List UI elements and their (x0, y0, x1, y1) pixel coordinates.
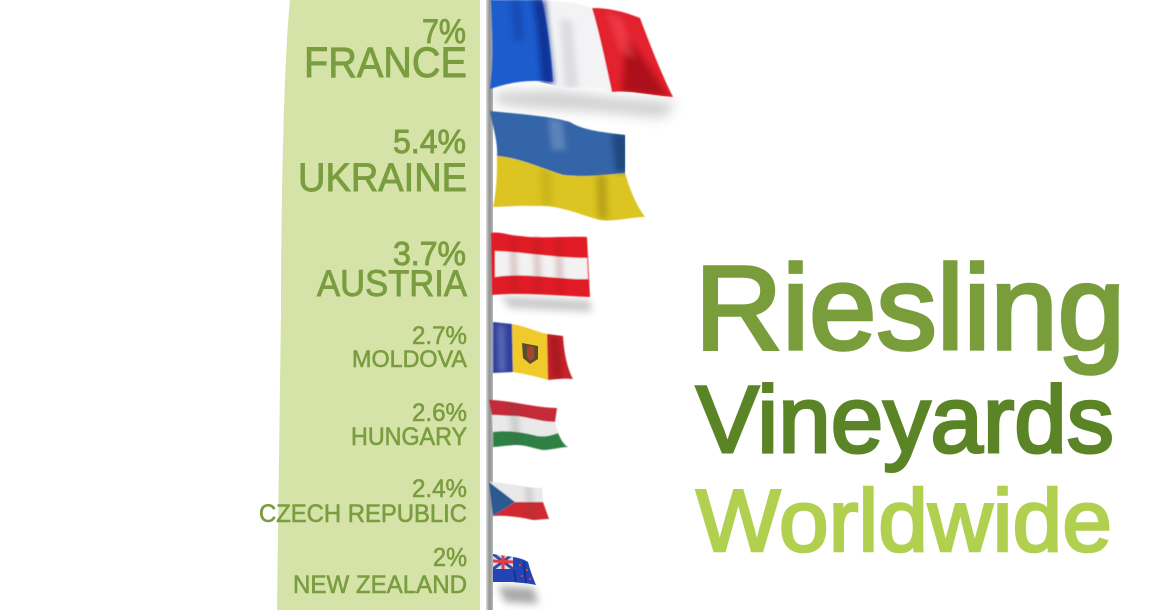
label: Moldova (352, 322, 467, 373)
title: Vineyards (696, 367, 1114, 473)
title (695, 241, 1125, 570)
flag: New Zealand (490, 552, 540, 604)
label: Ukraine: UKRAINE (298, 156, 467, 200)
flag: Hungary (489, 400, 568, 450)
label: Hungary (351, 399, 467, 451)
label: Czech Republic (259, 475, 467, 528)
title: Riesling (695, 241, 1125, 375)
flag: France (490, 0, 676, 118)
label: New Zealand: 2% (433, 542, 467, 572)
label: New Zealand: NEW ZEALAND (293, 571, 467, 599)
flag: Moldova (493, 322, 573, 380)
label: Czech Republic: 2.4% (412, 475, 467, 503)
label: Austria: AUSTRIA (317, 263, 467, 304)
emblem (522, 343, 538, 364)
flag: Czech Republic (489, 482, 549, 520)
label: France (304, 13, 467, 87)
flagpole (486, 0, 493, 610)
label: Czech Republic: CZECH REPUBLIC (259, 500, 467, 528)
label: France: 7% (422, 13, 466, 51)
label: Austria (317, 235, 467, 304)
label: New Zealand (293, 542, 467, 599)
label: Hungary: 2.6% (412, 399, 467, 427)
label: Austria: 3.7% (393, 235, 466, 272)
panel: green bar (277, 0, 480, 610)
label: Moldova: MOLDOVA (352, 346, 467, 373)
label: Hungary: HUNGARY (351, 423, 467, 451)
label: France: FRANCE (304, 39, 467, 87)
flag: Ukraine (490, 111, 645, 220)
flag: Austria (491, 233, 592, 312)
label: Moldova: 2.7% (412, 322, 467, 350)
title: Worldwide (696, 471, 1112, 570)
label: Ukraine: 5.4% (393, 123, 466, 160)
label: Ukraine (298, 123, 467, 200)
